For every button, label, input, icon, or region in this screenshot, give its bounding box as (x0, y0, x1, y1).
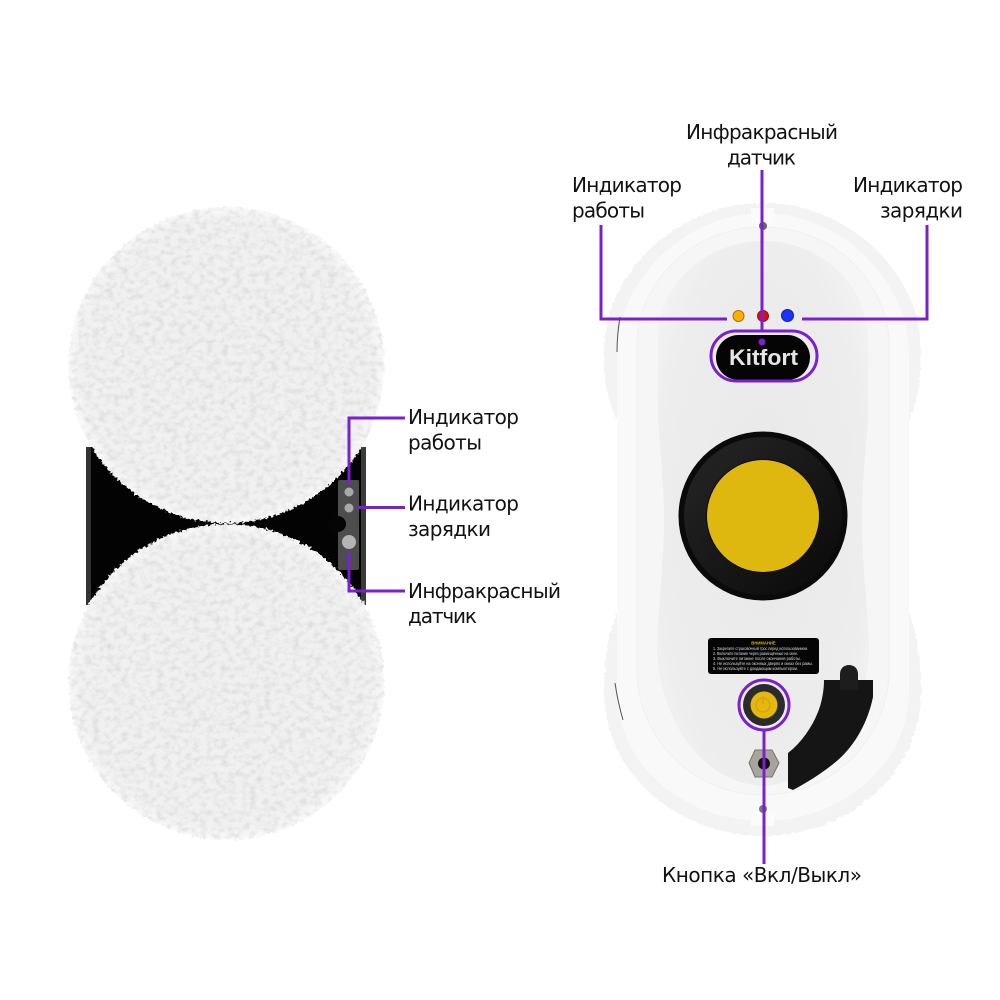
infrared sensor dot (758, 338, 766, 346)
warning label: 3. Выключите питание после окончания работы. (713, 656, 801, 661)
label: left charging indicator: Индикатор (408, 492, 519, 516)
line: left infrared sensor (349, 552, 405, 591)
label: left charging indicator: зарядки (408, 517, 491, 541)
charging socket (749, 750, 779, 777)
label: left work indicator: работы (408, 430, 482, 454)
warning label: 1. Закрепите страховочный трос перед использованием. (713, 646, 808, 651)
upper mop pad (68, 207, 384, 523)
line: left charging indicator (357, 506, 405, 509)
Kitfort logo badge: Kitfort (729, 345, 799, 370)
indicator strip (330, 480, 359, 570)
line: power button (762, 730, 766, 864)
label: right charging indicator: Индикатор (853, 173, 963, 197)
Kitfort logo badge (716, 335, 810, 380)
label: right work indicator: Индикатор (572, 173, 682, 197)
warning label: 4. Не используйте на оконных дверях и окнах без рамы. (713, 661, 813, 666)
thin dark edge of the shell (615, 317, 623, 720)
battery cover (788, 680, 873, 790)
second shell contour (637, 227, 889, 795)
warning label: ВНИМАНИЕ (751, 640, 776, 646)
label: right infrared sensor: Инфракрасный (686, 120, 838, 144)
warning label: 2. Включите питание через размещённые на окне. (713, 651, 798, 656)
line: right charging indicator (802, 225, 927, 319)
indicator: blue LED (782, 310, 794, 322)
label: right infrared sensor: датчик (727, 146, 796, 170)
device body (86, 447, 366, 605)
line: right infrared sensor (760, 170, 764, 331)
left device: side view with two mop pads (68, 207, 384, 840)
label: right charging indicator: зарядки (880, 198, 963, 222)
label: left infrared sensor: Инфракрасный (408, 579, 561, 603)
bottom screw notch (751, 805, 774, 826)
ring: power button highlight (739, 680, 789, 730)
cover latch (840, 665, 858, 690)
suction button (678, 432, 848, 600)
central panel (657, 241, 869, 786)
indicator: amber LED (733, 310, 744, 322)
callout lines (349, 170, 927, 864)
label: right work indicator: работы (572, 198, 645, 222)
top screw notch (751, 208, 774, 230)
power button (743, 684, 785, 726)
mop pads behind body (604, 203, 921, 836)
right device: top view (604, 203, 921, 836)
label: left infrared sensor: датчик (408, 604, 477, 628)
indicator: red LED (758, 310, 768, 322)
line: right work indicator (601, 225, 727, 319)
line: left work indicator (349, 418, 405, 484)
label: left work indicator: Индикатор (408, 405, 519, 429)
label: power button: Кнопка «Вкл/Выкл» (662, 863, 862, 887)
ring: logo highlight (711, 331, 817, 381)
white body shell (617, 213, 909, 821)
warning label: 5. Не используйте с докдающим компьютером. (713, 666, 798, 671)
warning label (708, 638, 819, 674)
lower mop pad (68, 524, 384, 840)
